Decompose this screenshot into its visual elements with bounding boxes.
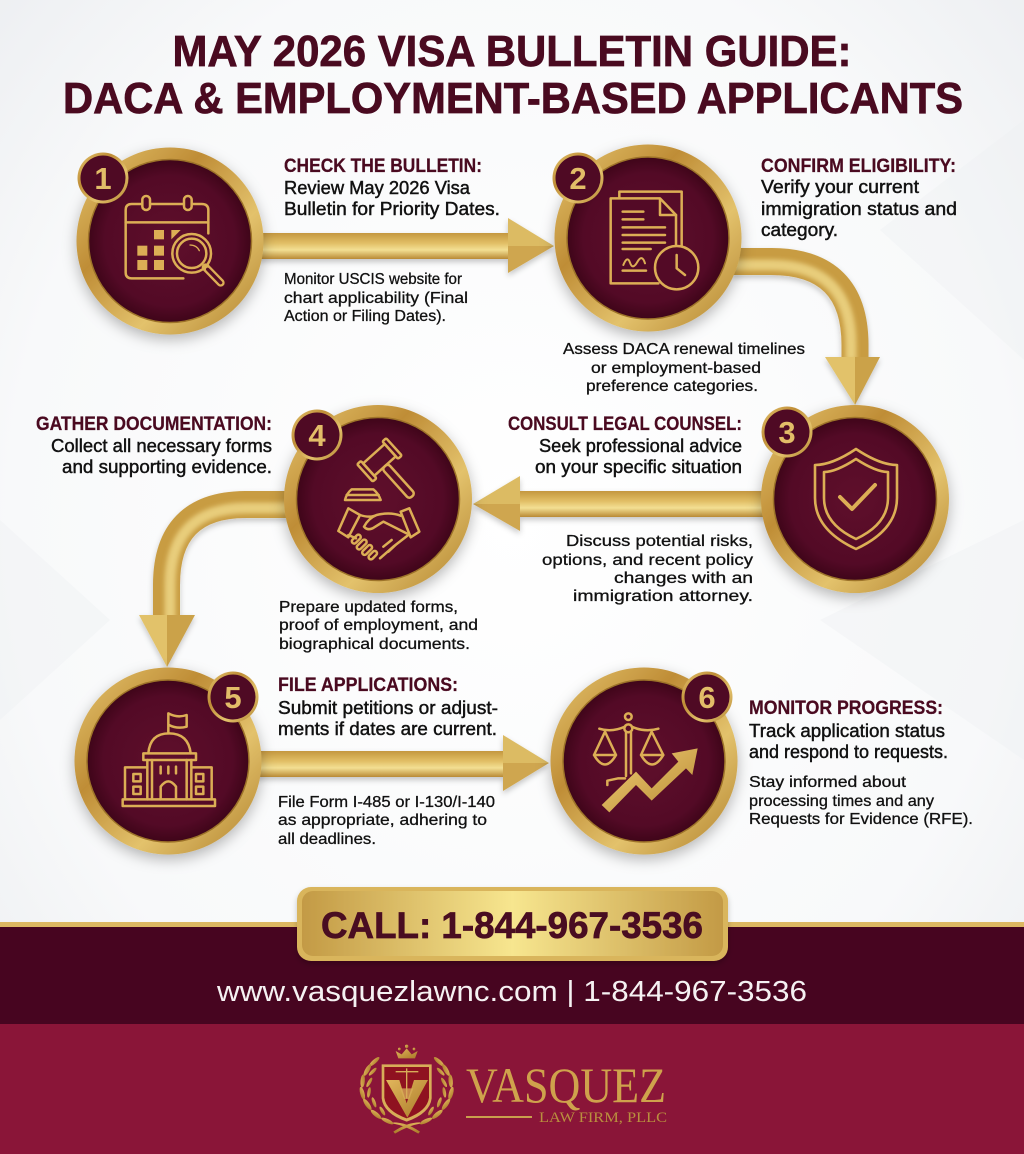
text: step 2: CONFIRM ELIGIBILITY: xyxy=(761,156,956,177)
logo: Vasquez Law Firm: VASQUEZ xyxy=(466,1057,666,1113)
text: step 6: and respond to requests. xyxy=(749,742,948,762)
badge 3 xyxy=(762,406,812,458)
text: step 1: Review May 2026 Visa xyxy=(284,178,471,198)
step 6: circle with scales and arrow icon xyxy=(550,668,738,854)
arrow: step 3 to 4 xyxy=(473,476,770,531)
text: step 5: File Form I-485 or I-130/I-140 xyxy=(278,794,495,811)
icon: shield with check xyxy=(815,449,897,549)
step 2: circle with document icon xyxy=(554,144,742,332)
text: step 1 xyxy=(284,156,500,325)
badge 4 xyxy=(292,410,342,460)
arrow: step 4 to 5 xyxy=(139,504,296,667)
text: step 1: chart applicability (Final xyxy=(284,290,468,307)
arrow: step 1 to 2 xyxy=(258,218,554,273)
text: step 3: Seek professional advice xyxy=(539,436,742,456)
text: step 6: Requests for Evidence (RFE). xyxy=(749,811,973,828)
text: step 6: Track application status xyxy=(749,721,945,741)
logo: Vasquez Law Firm: LAW FIRM, PLLC xyxy=(539,1110,667,1126)
icon: shield xyxy=(382,1064,432,1122)
badge 2 xyxy=(552,152,604,204)
badge 1: 1 xyxy=(94,161,112,196)
text: step 2: Assess DACA renewal timelines xyxy=(563,341,805,358)
text: step 3: changes with an xyxy=(614,570,753,587)
text: step 5: FILE APPLICATIONS: xyxy=(278,675,458,696)
badge 4: 4 xyxy=(308,418,326,453)
text: step 6: processing times and any xyxy=(749,793,934,810)
text: step 4: Collect all necessary forms xyxy=(51,436,272,456)
step 1: circle with calendar icon xyxy=(76,148,264,334)
website and phone: www.vasquezlawnc.com | 1-844-967-3536 xyxy=(216,976,807,1008)
title xyxy=(63,27,963,123)
badge 3: 3 xyxy=(778,415,796,450)
text: step 2 xyxy=(563,156,957,395)
step 3: circle with shield icon xyxy=(761,405,949,593)
text: step 3: options, and recent policy xyxy=(542,552,753,569)
call button: CALL: 1-844-967-3536 xyxy=(321,905,703,946)
badge 1 xyxy=(78,152,128,204)
icon: document and clock xyxy=(611,192,698,289)
logo: Vasquez Law Firm xyxy=(359,1045,667,1134)
footer: logo band xyxy=(0,1024,1024,1154)
icon: laurel wreath xyxy=(359,1056,455,1134)
text: step 5: as appropriate, adhering to xyxy=(278,812,487,829)
text: step 5: Submit petitions or adjust- xyxy=(278,698,498,718)
step 4: circle with gavel and handshake icon xyxy=(284,405,472,593)
text: step 3: CONSULT LEGAL COUNSEL: xyxy=(508,414,742,435)
text: step 5 xyxy=(278,675,498,848)
icon: crown xyxy=(396,1045,418,1058)
arrow: step 2 to 3 xyxy=(733,262,880,405)
text: step 4: biographical documents. xyxy=(279,636,470,653)
title: MAY 2026 VISA BULLETIN GUIDE: xyxy=(172,27,852,76)
text: step 4 xyxy=(36,414,478,653)
badge 6 xyxy=(682,672,732,722)
badge 5 xyxy=(208,672,258,722)
text: step 5: all deadlines. xyxy=(278,831,376,848)
text: step 6 xyxy=(749,698,973,828)
text: step 3 xyxy=(508,414,753,605)
text: step 1: CHECK THE BULLETIN: xyxy=(284,156,482,177)
text: step 3: on your specific situation xyxy=(535,457,742,477)
arrow: step 5 to 6 xyxy=(255,735,549,791)
icon: calendar with magnifier xyxy=(126,196,221,283)
text: step 2: Verify your current xyxy=(761,177,919,197)
text: step 1: Bulletin for Priority Dates. xyxy=(284,199,500,219)
text: step 4: and supporting evidence. xyxy=(62,457,272,477)
text: step 2: or employment-based xyxy=(591,360,761,377)
text: step 3: Discuss potential risks, xyxy=(566,533,753,550)
icon: gavel and handshake xyxy=(338,438,427,561)
text: step 2: immigration status and xyxy=(761,199,957,219)
text: step 4: proof of employment, and xyxy=(279,617,478,634)
title: DACA & EMPLOYMENT-BASED APPLICANTS xyxy=(63,74,963,123)
text: step 4: GATHER DOCUMENTATION: xyxy=(36,414,272,435)
call button xyxy=(297,887,728,961)
text: step 5: ments if dates are current. xyxy=(278,719,497,739)
footer: contact band xyxy=(0,922,1024,1024)
text: step 6: MONITOR PROGRESS: xyxy=(749,698,943,719)
text: step 1: Action or Filing Dates). xyxy=(284,308,446,325)
step 5: circle with capitol icon xyxy=(74,668,262,854)
text: step 6: Stay informed about xyxy=(749,774,907,791)
icon: scales and growth arrow xyxy=(594,713,698,812)
text: step 2: category. xyxy=(761,220,838,240)
badge 5: 5 xyxy=(224,680,242,715)
badge 2: 2 xyxy=(569,161,587,196)
badge 6: 6 xyxy=(698,680,716,715)
text: step 2: preference categories. xyxy=(586,378,758,395)
text: step 4: Prepare updated forms, xyxy=(279,599,458,616)
text: step 3: immigration attorney. xyxy=(573,588,753,605)
icon: capitol building xyxy=(123,713,215,806)
text: step 1: Monitor USCIS website for xyxy=(284,271,463,288)
